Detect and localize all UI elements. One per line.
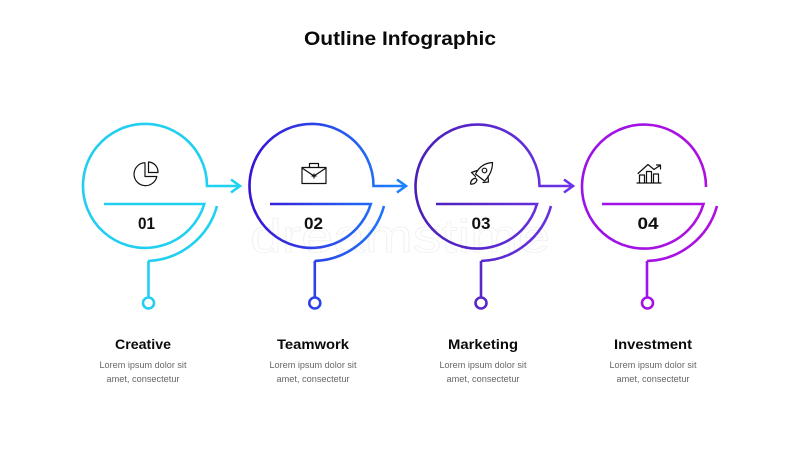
number 02: 02 bbox=[304, 215, 323, 233]
icon: pie chart bbox=[134, 162, 158, 186]
description: Marketing: Lorem ipsum dolor sit bbox=[440, 360, 527, 370]
step 3: Marketing bbox=[416, 125, 573, 384]
icon: bar chart with arrow bbox=[637, 164, 661, 183]
label: Investment: Investment bbox=[614, 337, 693, 352]
description: Creative bbox=[100, 360, 187, 384]
description: Marketing bbox=[440, 360, 527, 384]
circle diagram with arrow bbox=[416, 125, 573, 308]
label: Creative: Creative bbox=[115, 337, 172, 352]
number 01: 01 bbox=[138, 215, 155, 233]
description: Creative: Lorem ipsum dolor sit bbox=[100, 360, 187, 370]
number 04: 04 bbox=[638, 215, 659, 233]
description: Investment: Lorem ipsum dolor sit bbox=[610, 360, 697, 370]
step 4: Investment bbox=[582, 125, 717, 384]
description: Creative: amet, consectetur bbox=[106, 374, 180, 384]
description: Marketing: amet, consectetur bbox=[446, 374, 520, 384]
label: Marketing: Marketing bbox=[448, 337, 518, 352]
text: dreamstime bbox=[250, 210, 550, 262]
circle diagram with arrow bbox=[250, 124, 406, 309]
description: Teamwork bbox=[270, 360, 357, 384]
step 1: Creative bbox=[83, 124, 240, 384]
label: Teamwork: Teamwork bbox=[277, 337, 350, 352]
description: Investment: amet, consectetur bbox=[616, 374, 690, 384]
step 2: Teamwork bbox=[250, 124, 406, 384]
description: Teamwork: amet, consectetur bbox=[276, 374, 350, 384]
number 03: 03 bbox=[472, 215, 490, 233]
icon: rocket bbox=[470, 162, 492, 184]
description: Teamwork: Lorem ipsum dolor sit bbox=[270, 360, 357, 370]
circle diagram bbox=[582, 125, 717, 308]
circle diagram with arrow bbox=[83, 124, 240, 308]
description: Investment bbox=[610, 360, 697, 384]
icon: briefcase bbox=[302, 164, 326, 184]
title: Outline Infographic bbox=[304, 29, 496, 50]
